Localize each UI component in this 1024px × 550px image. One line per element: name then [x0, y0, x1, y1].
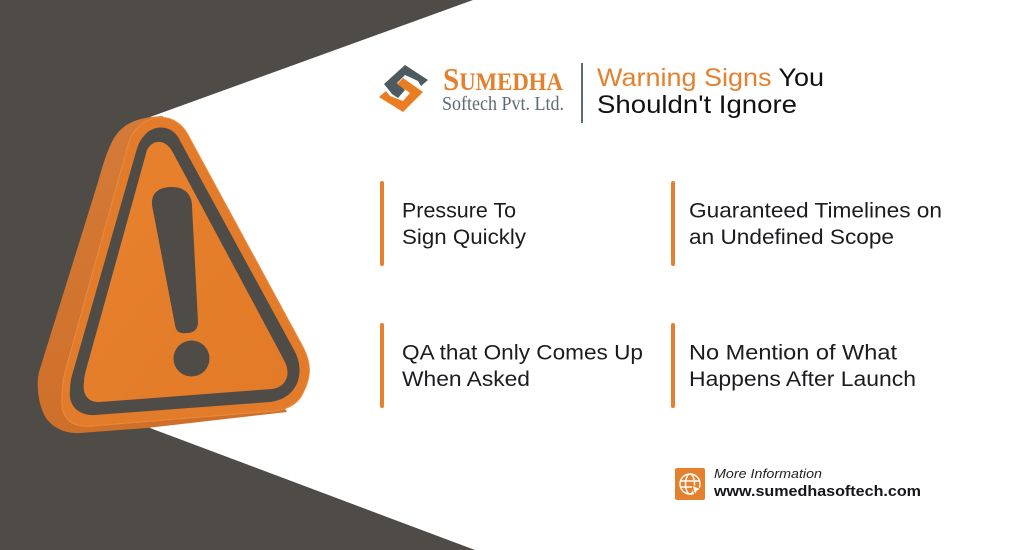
more information label: More Information	[714, 466, 822, 481]
title line 2: Shouldn't Ignore	[597, 91, 797, 119]
logo subtitle: Softech Pvt. Ltd.	[442, 93, 564, 115]
triangle front rim	[62, 117, 309, 426]
exclamation mark stem	[152, 187, 198, 333]
exclamation mark dot	[174, 340, 210, 376]
divider	[581, 63, 583, 123]
sign 4: nothing after launch: No Mention of What	[689, 340, 897, 364]
sign 1: pressure to sign: Pressure To	[402, 198, 516, 222]
sign 2: guaranteed timelines: an Undefined Scope	[689, 225, 894, 249]
sign 3: QA only when asked: QA that Only Comes Up	[402, 340, 643, 364]
sign 3: QA only when asked: When Asked	[402, 367, 530, 391]
sign 1: pressure to sign	[380, 181, 526, 266]
icon: globe with cursor	[675, 468, 705, 500]
sign 4: nothing after launch: Happens After Launch	[689, 367, 916, 391]
website url: www.sumedhasoftech.com	[713, 483, 921, 500]
title line 1: Warning Signs You	[597, 64, 824, 92]
triangle 3D side	[38, 116, 287, 433]
logo mark orange	[379, 78, 423, 112]
triangle inner face	[84, 142, 287, 402]
logo mark grey	[384, 65, 428, 98]
dark background wedge	[0, 0, 475, 550]
logo name: SUMEDHA	[443, 61, 563, 97]
logo	[379, 61, 564, 115]
sign 3: QA only when asked	[380, 323, 643, 408]
sign 4: nothing after launch	[671, 323, 916, 408]
icon: warning triangle	[38, 116, 309, 433]
sign 1: pressure to sign: Sign Quickly	[402, 225, 526, 249]
triangle dark ring	[70, 128, 300, 415]
sign 2: guaranteed timelines: Guaranteed Timelines on	[689, 198, 942, 222]
title	[597, 64, 824, 119]
sign 2: guaranteed timelines	[671, 181, 942, 266]
